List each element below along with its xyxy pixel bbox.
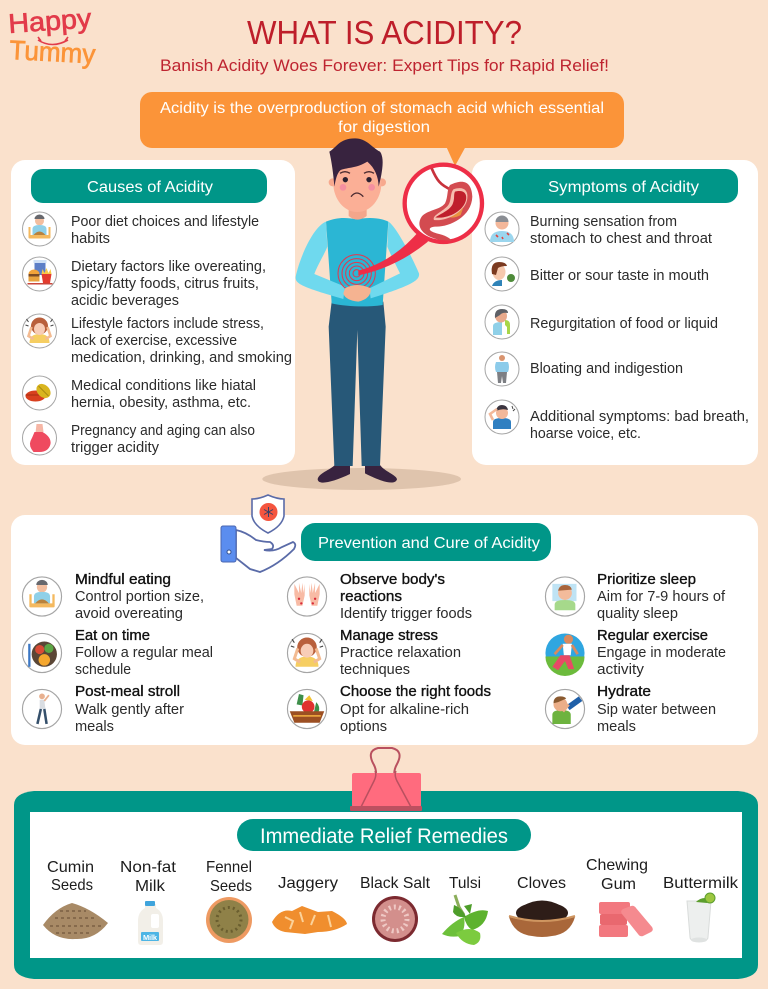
shadow <box>262 468 461 490</box>
icon: regurgitation <box>485 305 519 339</box>
remedy: cumin seeds <box>43 859 108 939</box>
panel: immediate relief remedies <box>14 748 758 979</box>
cause: lifestyle factors: lack of exercise, excessive <box>71 333 237 349</box>
icon: manage stress <box>287 633 327 673</box>
icon: drinking water <box>545 689 585 729</box>
symptom: regurgitation: Regurgitation of food or liquid <box>530 316 718 332</box>
tip: observe body's reactions: Observe body's <box>340 572 445 588</box>
cause: dietary factors: acidic beverages <box>71 293 179 309</box>
cause: pregnancy and aging <box>71 423 255 456</box>
cause: pregnancy and aging: trigger acidity <box>71 440 160 456</box>
tip: prioritize sleep: Prioritize sleep <box>597 572 696 588</box>
cause: lifestyle factors: medication, drinking, and smoking <box>71 350 292 366</box>
tip: observe body's reactions <box>340 572 472 622</box>
tip: eat on time <box>75 628 213 678</box>
tip: choose the right foods <box>340 684 491 735</box>
tip: observe body's reactions: reactions <box>340 589 402 605</box>
panel: causes <box>11 160 295 465</box>
icon: bloating <box>485 352 519 386</box>
title: WHAT IS ACIDITY? <box>247 14 522 51</box>
pain rings <box>338 255 375 292</box>
tip: hydrate: Hydrate <box>597 684 651 700</box>
icon: bad breath <box>485 400 519 434</box>
remedy: chewing gum: Chewing <box>586 857 648 874</box>
cause: poor diet <box>71 214 259 247</box>
symptom: burning sensation: stomach to chest and throat <box>530 231 712 247</box>
symptom: additional symptoms: Additional symptoms: bad breath, <box>530 409 749 425</box>
heading: causes <box>31 169 267 203</box>
remedy: non-fat milk <box>120 859 177 945</box>
tip: regular exercise: Engage in moderate <box>597 645 726 661</box>
tip: post-meal stroll <box>75 684 184 735</box>
tip: mindful eating: Mindful eating <box>75 572 171 588</box>
symptom: additional symptoms <box>530 409 749 442</box>
remedy: tulsi: Tulsi <box>449 875 481 892</box>
icon: pills <box>22 376 56 410</box>
tip: manage stress: Practice relaxation <box>340 645 461 661</box>
symptom: burning sensation: Burning sensation from <box>530 214 677 230</box>
heading: remedies <box>237 819 531 851</box>
symptom: burning sensation <box>530 214 712 247</box>
tip: hydrate <box>597 684 716 735</box>
tip: post-meal stroll: Walk gently after <box>75 702 184 718</box>
cause: dietary factors <box>71 259 266 309</box>
icon: walking person <box>22 689 62 729</box>
tip: regular exercise: Regular exercise <box>597 628 708 644</box>
heading: prevention <box>301 523 551 561</box>
callout: definition of acidity: for digestion <box>338 119 430 136</box>
tip: eat on time: schedule <box>75 662 131 678</box>
tip: mindful eating <box>75 572 204 622</box>
shoes <box>318 465 397 483</box>
remedy: chewing gum <box>586 857 653 937</box>
cause: poor diet: Poor diet choices and lifestyle <box>71 214 259 230</box>
remedy: tulsi <box>442 875 488 945</box>
tip: manage stress <box>340 628 461 678</box>
remedy: non-fat milk: Non-fat <box>120 859 177 876</box>
heading: causes: Causes of Acidity <box>87 179 213 196</box>
cheeks <box>340 184 346 191</box>
remedy: cumin seeds: Seeds <box>51 877 93 894</box>
pointer wedge <box>358 230 428 275</box>
remedy: black salt: Black Salt <box>360 875 431 892</box>
icon: hand holding shield <box>221 495 295 572</box>
icon: hands with spots <box>287 577 327 616</box>
remedy: black salt <box>360 875 431 942</box>
tip: choose the right foods: options <box>340 719 387 735</box>
remedy: jaggery <box>272 875 347 934</box>
cause: medical conditions: hernia, obesity, asthma, etc. <box>71 395 251 411</box>
tip: prioritize sleep: quality sleep <box>597 606 678 622</box>
heading: symptoms <box>502 169 738 203</box>
panel: prevention and cure <box>11 495 758 745</box>
cause: lifestyle factors <box>71 316 292 366</box>
remedy: fennel seeds <box>206 859 252 943</box>
symptom: bloating: Bloating and indigestion <box>530 361 683 377</box>
remedy: buttermilk <box>663 875 739 942</box>
tip: mindful eating: avoid overeating <box>75 606 183 622</box>
tip: observe body's reactions: Identify trigger foods <box>340 606 472 622</box>
icon: sleeping person <box>545 577 585 616</box>
hair <box>329 138 383 187</box>
heading: prevention: Prevention and Cure of Acidity <box>318 535 540 552</box>
callout: definition of acidity: Acidity is the overproduction of stomach acid which essential <box>160 100 604 117</box>
cause: medical conditions: Medical conditions like hiatal <box>71 378 256 394</box>
remedy: chewing gum: Gum <box>601 876 636 893</box>
eyes <box>343 177 348 182</box>
symptom: additional symptoms: hoarse voice, etc. <box>530 426 641 442</box>
ears <box>329 178 337 186</box>
cause: dietary factors: Dietary factors like overeating, <box>71 259 266 275</box>
heading: symptoms: Symptoms of Acidity <box>548 179 699 196</box>
icon: food basket <box>287 689 327 729</box>
remedy: non-fat milk: Milk <box>143 933 158 942</box>
icon: pregnancy <box>22 421 56 455</box>
icon: person eating <box>22 212 56 246</box>
binder clip <box>350 748 422 811</box>
tip: choose the right foods: Opt for alkaline-rich <box>340 702 469 718</box>
tip: choose the right foods: Choose the right foods <box>340 684 491 700</box>
callout: definition of acidity <box>140 92 624 166</box>
brows and mouth <box>340 172 374 197</box>
cause: lifestyle factors: Lifestyle factors include stress, <box>71 316 264 332</box>
sleeves <box>296 222 419 299</box>
tip: hydrate: Sip water between <box>597 702 716 718</box>
tip: regular exercise <box>597 628 726 678</box>
tip: manage stress: techniques <box>340 662 410 678</box>
stomach <box>419 168 472 241</box>
remedy: cloves <box>509 875 575 937</box>
tip: mindful eating: Control portion size, <box>75 589 204 605</box>
cause: poor diet: habits <box>71 231 110 247</box>
remedy: buttermilk: Buttermilk <box>663 875 739 892</box>
symptom: bitter taste: Bitter or sour taste in mouth <box>530 268 709 284</box>
remedy: non-fat milk: Milk <box>135 878 166 895</box>
neck <box>349 203 367 220</box>
tip: hydrate: meals <box>597 719 636 735</box>
icon: meal plate <box>22 633 62 673</box>
tip: prioritize sleep <box>597 572 726 622</box>
remedy: jaggery: Jaggery <box>278 875 338 892</box>
trousers <box>329 302 386 466</box>
shirt <box>326 218 388 306</box>
tip: regular exercise: activity <box>597 662 645 678</box>
cause: pregnancy and aging: Pregnancy and aging can also <box>71 423 255 439</box>
cause: dietary factors: spicy/fatty foods, citrus fruits, <box>71 276 259 292</box>
icon: fast food <box>22 257 56 291</box>
remedy: fennel seeds: Seeds <box>210 878 252 895</box>
remedy: cumin seeds: Cumin <box>47 859 94 876</box>
face <box>333 155 381 212</box>
remedy: fennel seeds: Fennel <box>206 859 252 876</box>
tip: post-meal stroll: meals <box>75 719 114 735</box>
logo: Happy Tummy: Tummy <box>9 35 97 70</box>
remedy: cloves: Cloves <box>517 875 566 892</box>
tip: post-meal stroll: Post-meal stroll <box>75 684 180 700</box>
tip: manage stress: Manage stress <box>340 628 438 644</box>
illustration: man with stomach pain <box>262 138 482 490</box>
tip: eat on time: Follow a regular meal <box>75 645 213 661</box>
icon: stressed person <box>22 314 56 348</box>
subtitle: Banish Acidity Woes Forever: Expert Tips for Rapid Relief! <box>160 56 609 75</box>
logo: Happy Tummy <box>7 3 97 70</box>
icon: bitter taste <box>485 257 519 291</box>
magnifier circle <box>405 165 482 242</box>
cause: medical conditions <box>71 378 256 411</box>
logo: Happy Tummy: Happy <box>7 3 93 39</box>
hands <box>343 285 371 302</box>
tip: prioritize sleep: Aim for 7-9 hours of <box>597 589 726 605</box>
panel: symptoms <box>472 160 758 465</box>
heading: remedies: Immediate Relief Remedies <box>260 825 508 848</box>
icon: mindful eating <box>22 577 62 616</box>
icon: burning chest <box>485 212 519 246</box>
tip: eat on time: Eat on time <box>75 628 150 644</box>
icon: runner <box>545 633 585 676</box>
